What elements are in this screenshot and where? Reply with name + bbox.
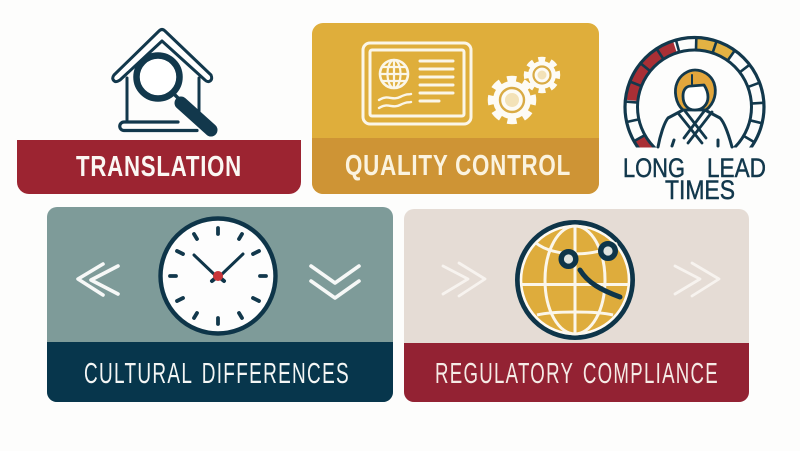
label: cultural differences: CULTURAL DIFFERENCES — [84, 358, 350, 390]
label: translation: TRANSLATION — [76, 151, 242, 183]
icon: right chevrons — [311, 266, 359, 298]
label: long lead times: LEAD — [707, 153, 766, 183]
icon: document with globe — [363, 43, 471, 124]
icon: clock — [160, 218, 276, 334]
panel: quality control — [312, 23, 599, 194]
icon: left chevrons — [443, 263, 485, 296]
icon: left chevrons — [78, 264, 118, 295]
panel: long lead times — [623, 36, 766, 200]
label: long lead times: TIMES — [665, 175, 735, 205]
icon: right chevrons — [675, 263, 719, 296]
icon: person — [658, 70, 732, 147]
panel: translation — [17, 30, 301, 194]
label: long lead times: LONG — [623, 153, 685, 183]
panel: regulatory compliance — [404, 209, 749, 402]
banner: translation — [17, 140, 301, 194]
icon: gears — [488, 57, 560, 124]
panel: cultural differences — [47, 207, 393, 402]
icon: house with magnifying glass — [113, 30, 212, 130]
icon: dial gauge — [623, 36, 766, 148]
label: long lead times — [623, 153, 766, 205]
label: quality control: QUALITY CONTROL — [345, 150, 571, 182]
icon: globe with face — [518, 222, 632, 338]
